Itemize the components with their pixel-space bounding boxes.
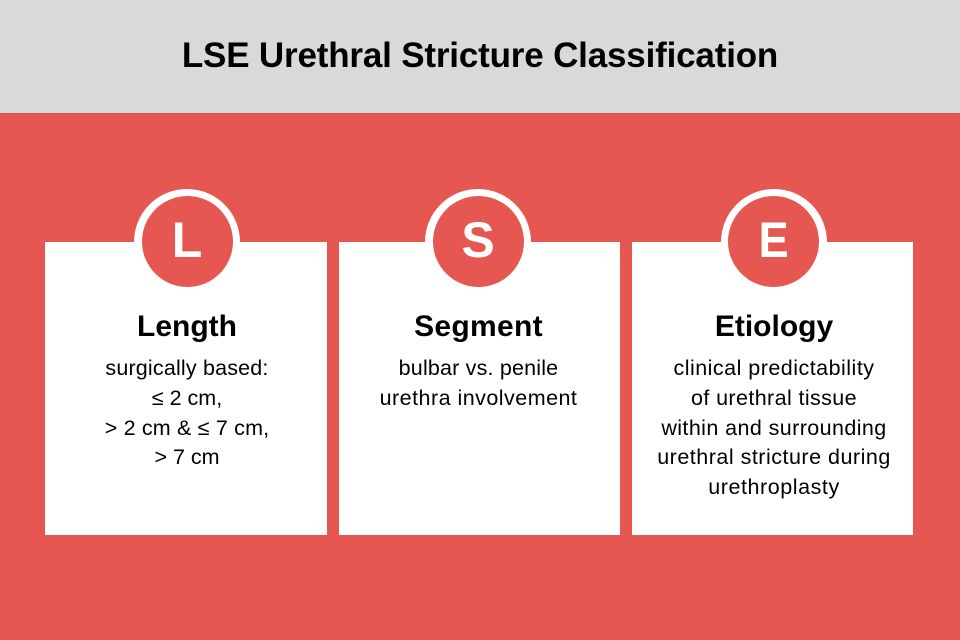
icon: letter L [142,196,232,287]
panel: segment [339,242,620,535]
text: etiology criteria: urethral stricture during [657,445,891,469]
icon: letter L: L [172,212,202,268]
icon ring: E [720,189,826,295]
text: etiology criteria: clinical predictability [673,356,875,380]
text: length criteria: ≤ 2 cm, [152,386,222,410]
icon: letter S [432,196,524,287]
text: etiology criteria: of urethral tissue [691,386,857,410]
heading: Length: Length [137,310,237,342]
text: length criteria: > 7 cm [154,445,220,469]
title: LSE Urethral Stricture Classification [182,36,778,74]
text: segment criteria: urethra involvement [380,386,577,410]
text: length criteria [105,356,269,469]
text: length criteria: surgically based: [105,356,269,380]
text: segment criteria [380,356,577,410]
panel: etiology [632,242,913,535]
text: etiology criteria [657,356,891,499]
text: segment criteria: bulbar vs. penile [399,356,558,380]
header band [0,0,960,113]
icon: letter E: E [758,212,789,268]
text: length criteria: > 2 cm & ≤ 7 cm, [105,416,269,440]
icon: letter E [728,196,819,287]
icon ring: L [134,189,240,295]
icon: letter S: S [461,212,495,268]
text: etiology criteria: urethroplasty [708,475,840,499]
heading: Etiology: Etiology [715,310,833,342]
text: etiology criteria: within and surrounding [661,416,887,440]
heading: Segment: Segment [414,310,543,342]
panel: length [45,242,327,535]
icon ring: S [425,189,531,295]
